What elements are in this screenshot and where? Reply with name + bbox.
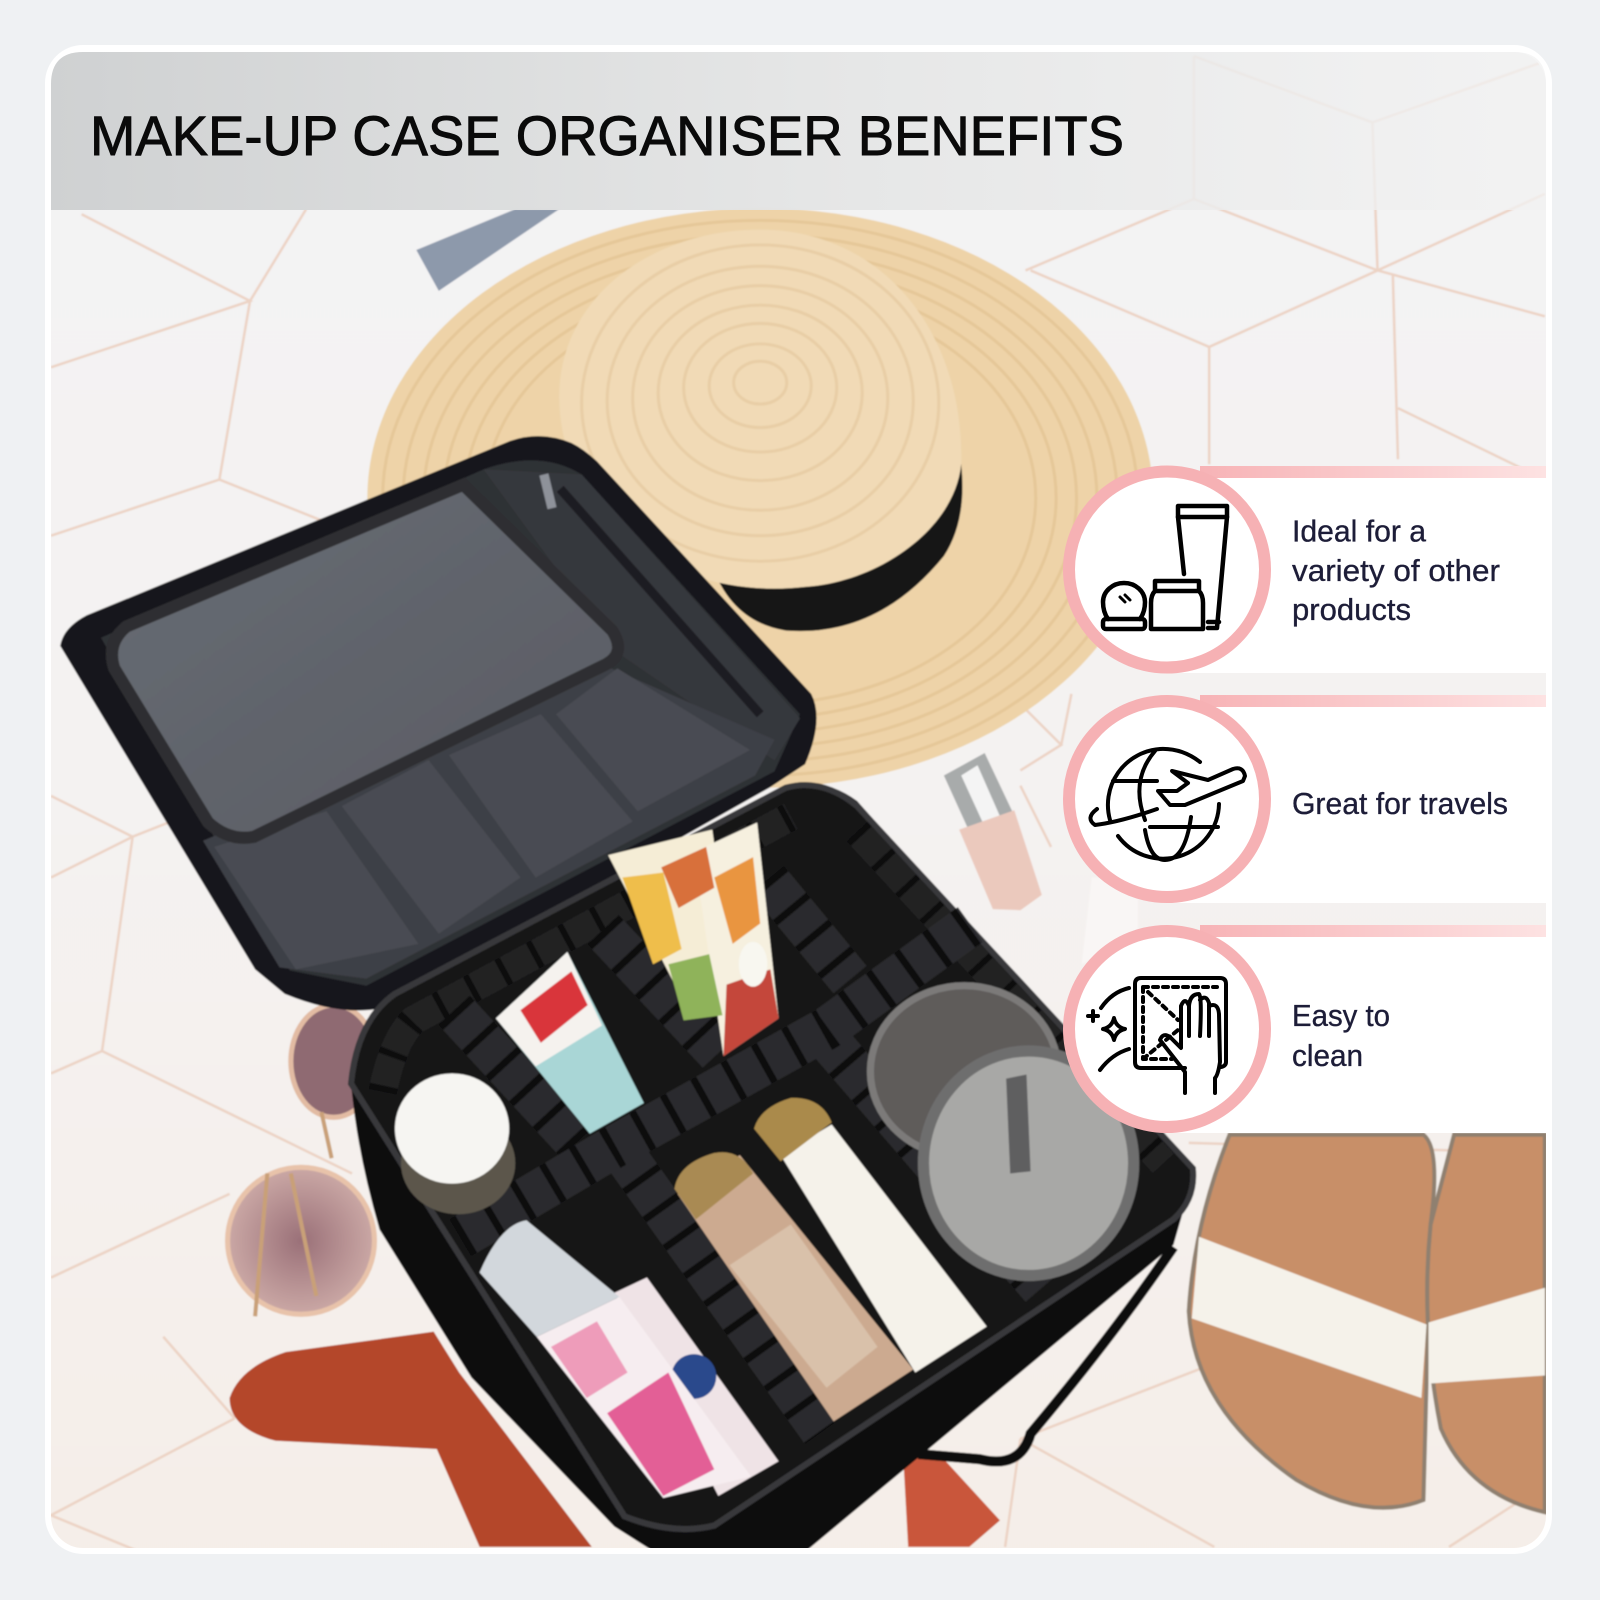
text: easy to clean	[1292, 998, 1390, 1073]
zip pull	[544, 474, 552, 508]
cleansing pads	[870, 986, 1134, 1276]
straw hat	[367, 208, 1153, 788]
sensitive toothpaste tube	[496, 952, 644, 1134]
text: ideal for a variety of other products: Ideal for a	[1292, 514, 1427, 548]
white bottle	[754, 1098, 987, 1372]
dividers	[454, 880, 1042, 1432]
hat band	[714, 464, 962, 631]
text: ideal for a variety of other products: products	[1292, 592, 1411, 627]
red knit strap	[230, 1332, 592, 1547]
header band	[51, 52, 1546, 210]
lid pleats	[203, 668, 774, 979]
dry shampoo can	[480, 1220, 751, 1498]
panel: easy to clean	[1069, 925, 1546, 1133]
text: ideal for a variety of other products: variety of other	[1292, 553, 1500, 588]
text: easy to clean: Easy to	[1292, 998, 1390, 1033]
sunglasses	[228, 1005, 377, 1316]
second shampoo can	[614, 1278, 779, 1496]
lid lining	[101, 460, 800, 986]
white bottle behind case	[1082, 878, 1138, 964]
icon: cosmetics	[1103, 506, 1227, 629]
nail polish bottle	[944, 753, 1042, 910]
icon: globe and plane	[1090, 749, 1245, 860]
panel: great for travels	[1069, 695, 1546, 903]
tray rim	[351, 785, 1193, 1529]
case lid	[60, 436, 817, 1011]
conditioner bottle	[674, 1152, 913, 1421]
pocket zipper	[560, 489, 760, 714]
white jar	[395, 1073, 515, 1214]
handle strap	[918, 1247, 1173, 1461]
lid pocket	[484, 469, 800, 760]
text: great for travels: Great for travels	[1292, 786, 1508, 821]
lid flap	[112, 485, 618, 838]
colourful tubes	[608, 822, 779, 1056]
text: ideal for a variety of other products	[1292, 514, 1500, 627]
tray walls	[383, 816, 1163, 1163]
tag behind hat	[416, 209, 559, 291]
hat crown	[559, 230, 961, 589]
icon: cleaning cloth and hand	[1088, 978, 1226, 1093]
title: MAKE-UP CASE ORGANISER BENEFITS	[90, 104, 1124, 167]
text: easy to clean: clean	[1292, 1038, 1363, 1073]
panel: ideal for other products	[1069, 466, 1546, 673]
sandals	[1189, 1135, 1545, 1512]
case base	[351, 784, 1193, 1551]
hat brim	[367, 208, 1153, 788]
